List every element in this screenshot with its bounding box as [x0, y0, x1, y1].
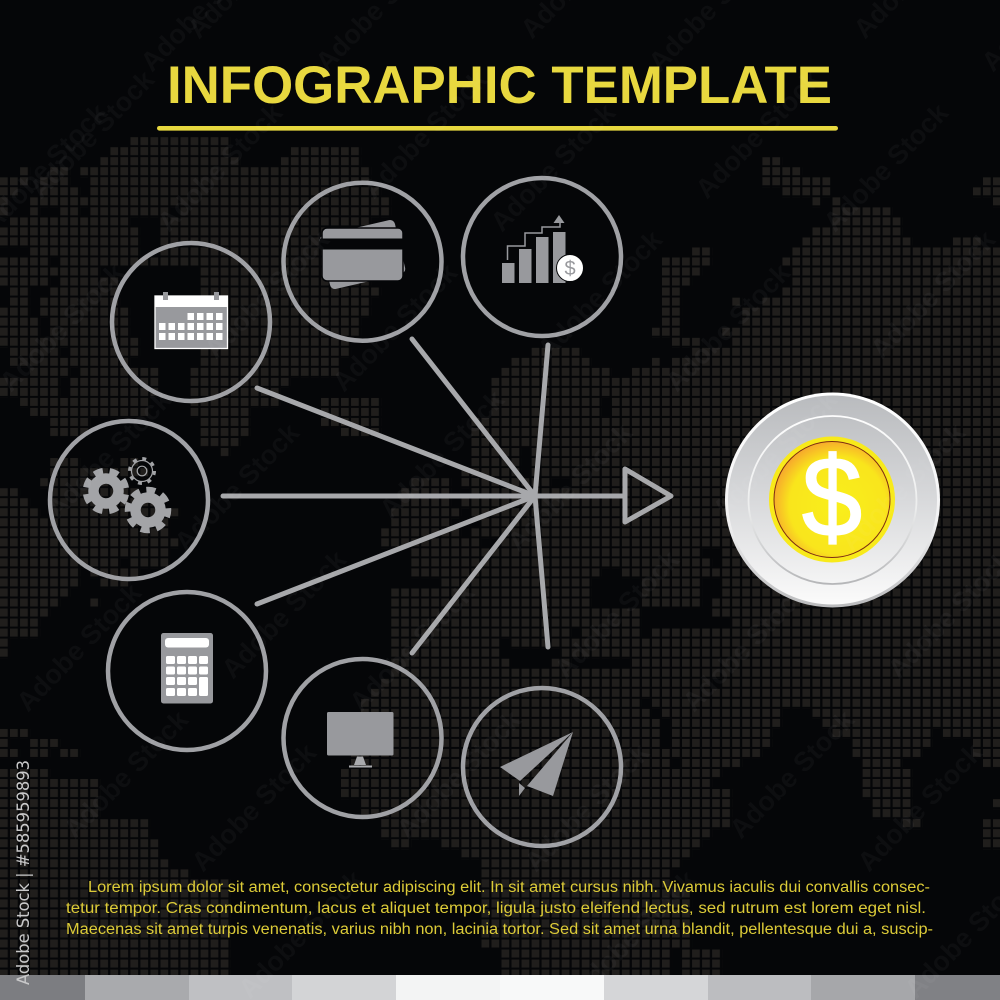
watermarks: Adobe Stock	[199, 224, 336, 364]
watermarks: Adobe Stock	[835, 417, 972, 557]
icon: paper plane	[500, 732, 573, 796]
watermarks: Adobe Stock	[549, 544, 686, 684]
watermarks: Adobe Stock	[707, 384, 844, 524]
watermarks: Adobe Stock	[374, 384, 511, 524]
watermarks: Adobe Stock	[233, 864, 370, 1000]
icon: calculator	[161, 633, 213, 704]
watermarks: Adobe Stock	[216, 544, 353, 684]
icon: credit cards	[319, 219, 406, 290]
body text: Lorem ipsum dolor sit amet, consectetur adipiscing elit. In sit amet cursus nibh. Vivamus iaculis dui convallis consec-	[88, 879, 930, 896]
body text: Maecenas sit amet turpis venenatis, varius nibh non, lacinia tortor. Sed sit amet urna blandit, pellentesque dui a, suscip-	[66, 921, 933, 938]
dollar coin	[725, 392, 940, 608]
watermarks: Adobe Stock	[532, 224, 669, 364]
dollar coin: $	[802, 434, 862, 560]
watermarks: Adobe Stock	[502, 417, 639, 557]
circle: calculator	[108, 592, 266, 750]
watermarks: Adobe Stock	[485, 97, 622, 237]
converging lines and arrow	[223, 339, 671, 653]
watermarks: Adobe Stock	[41, 384, 178, 524]
circle: gears	[50, 421, 208, 579]
watermarks: Adobe Stock	[566, 864, 703, 1000]
icon: gears	[83, 458, 170, 532]
icon: calendar	[155, 292, 228, 348]
watermarks: Adobe Stock	[391, 704, 528, 844]
watermarks: Adobe Stock	[344, 577, 481, 717]
watermarks: Adobe Stock	[169, 417, 306, 557]
watermarks: Adobe Stock	[152, 97, 289, 237]
circle: paper plane	[463, 688, 621, 846]
circle: growth chart	[463, 178, 621, 336]
bottom gradient strip	[0, 975, 1000, 1000]
watermarks: Adobe Stock	[519, 737, 656, 877]
circle: credit cards	[284, 183, 442, 341]
icon: monitor	[327, 712, 394, 768]
watermarks: Adobe Stock	[357, 64, 494, 204]
watermarks: Adobe Stock	[24, 64, 161, 204]
circle: calendar	[112, 243, 270, 401]
circle: monitor	[284, 659, 442, 817]
body text	[66, 879, 933, 938]
watermarks: Adobe Stock	[818, 97, 955, 237]
watermarks: Adobe Stock	[58, 704, 195, 844]
watermarks: Adobe Stock	[677, 577, 814, 717]
watermarks: Adobe Stock	[865, 224, 1000, 364]
watermarks: Adobe Stock	[660, 257, 797, 397]
title: INFOGRAPHIC TEMPLATE	[167, 56, 832, 115]
title underline	[157, 126, 838, 131]
vertical stock id: Adobe Stock | #585959893	[14, 760, 34, 985]
watermarks: Adobe Stock	[724, 704, 861, 844]
watermarks: Adobe Stock	[690, 64, 827, 204]
watermarks: Adobe Stock	[327, 257, 464, 397]
body text: tetur tempor. Cras condimentum, lacus et aliquet tempor, ligula justo eleifend lectus, sed rutrum est lorem eget nisl.	[66, 900, 926, 917]
watermarks: Adobe Stock	[186, 737, 323, 877]
watermarks: Adobe Stock	[11, 577, 148, 717]
icon: bar chart with coin	[502, 215, 584, 283]
watermarks: Adobe Stock	[852, 737, 989, 877]
icon: bar chart with coin: $	[564, 258, 576, 280]
